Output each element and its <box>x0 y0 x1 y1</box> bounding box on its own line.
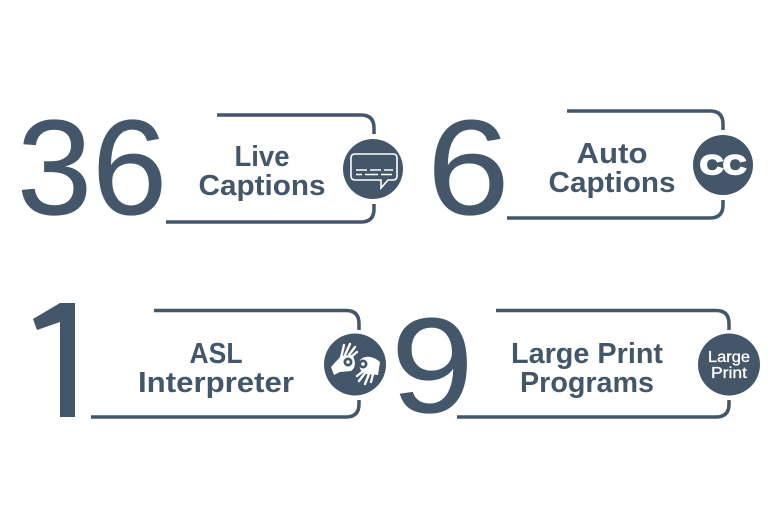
label: live captions: Captions <box>198 170 326 202</box>
icon: closed captions <box>693 135 753 195</box>
label: live captions: Live <box>234 141 290 173</box>
number: 9: 9 <box>391 291 474 441</box>
panel: live captions <box>17 92 403 243</box>
panel: auto captions <box>427 93 753 243</box>
label: asl interpreter: ASL <box>190 338 242 370</box>
label: live captions <box>198 141 326 202</box>
icon: speech bubble <box>343 139 403 199</box>
label: large print programs <box>511 338 663 399</box>
panel: large print programs <box>391 291 760 441</box>
label: asl interpreter: Interpreter <box>138 367 294 399</box>
frame: asl interpreter <box>91 310 359 417</box>
icon: large print: Print <box>711 365 748 382</box>
number: 1 <box>33 303 75 417</box>
label: large print programs: Large Print <box>511 338 663 370</box>
number: 1: 1 <box>22 295 97 446</box>
label: auto captions: Auto <box>576 138 648 170</box>
label: auto captions: Captions <box>548 167 676 199</box>
icon: large print <box>698 334 760 396</box>
frame: live captions <box>166 115 374 222</box>
icon: sign language hands <box>324 334 386 396</box>
label: large print programs: Programs <box>520 367 654 399</box>
frame: auto captions <box>507 111 723 218</box>
label: asl interpreter <box>138 338 294 399</box>
frame: large print programs <box>457 310 729 417</box>
label: auto captions <box>548 138 676 199</box>
icon: large print: Large <box>708 349 750 366</box>
panel: asl interpreter <box>33 303 386 419</box>
number: 36: 36 <box>17 92 167 243</box>
number: 6: 6 <box>427 93 510 243</box>
icon: closed captions: CC <box>700 150 746 180</box>
